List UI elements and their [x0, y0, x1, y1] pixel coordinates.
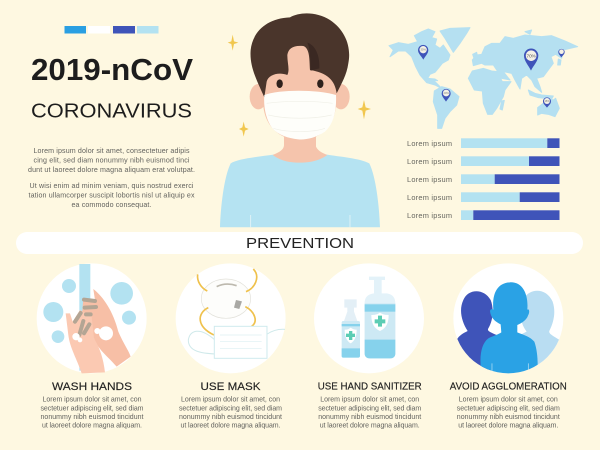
column: avoid agglomeration: ut laoreet dolore magna aliquam. — [458, 423, 558, 430]
prevention banner: PREVENTION — [246, 236, 354, 252]
map pins: 70% — [526, 53, 536, 58]
column: use hand sanitizer: Lorem ipsum dolor sit amet, con — [320, 396, 419, 404]
column: wash hands — [40, 381, 144, 430]
column: use mask — [179, 381, 282, 430]
row 2 — [407, 156, 560, 166]
column: wash hands: ut laoreet dolore magna aliquam. — [42, 423, 142, 430]
column: wash hands: sectetuer adipiscing elit, sed diam — [40, 405, 144, 412]
column: use mask: ut laoreet dolore magna aliquam. — [180, 423, 281, 430]
character wearing mask — [220, 13, 380, 227]
column: wash hands: nonummy nibh euismod tincidunt — [40, 414, 144, 421]
row 1: Lorem ipsum — [407, 139, 452, 148]
map pins: 20% — [443, 91, 449, 95]
intro text: ea commodo consequat. — [72, 201, 152, 209]
column: use hand sanitizer: ut laoreet dolore magna aliquam. — [320, 423, 420, 430]
column: use hand sanitizer — [318, 382, 422, 430]
row 5: Lorem ipsum — [407, 211, 452, 220]
row 4: Lorem ipsum — [407, 193, 452, 202]
ears — [250, 84, 350, 109]
row 1 — [407, 138, 560, 148]
row 5 — [407, 210, 560, 220]
face mask — [264, 91, 336, 139]
panel: sanitizer and agglomeration icons — [314, 263, 567, 375]
neck — [273, 133, 327, 163]
sparkles — [228, 35, 371, 137]
title: 2019-nCoV — [31, 52, 193, 87]
column: avoid agglomeration: nonummy nibh euismod tincidunt — [457, 414, 560, 421]
hair — [251, 13, 349, 97]
map pins: 15% — [544, 99, 550, 103]
column: wash hands: Lorem ipsum dolor sit amet, con — [42, 396, 142, 404]
intro text: Lorem ipsum dolor sit amet, consectetuer adipis — [34, 147, 190, 155]
column: avoid agglomeration: sectetuer adipiscing elit, sed diam — [457, 405, 560, 412]
row 4 — [407, 192, 560, 202]
row 3 — [407, 174, 560, 184]
map pins — [418, 45, 565, 108]
column: use mask: sectetuer adipiscing elit, sed diam — [179, 405, 282, 412]
column: avoid agglomeration — [450, 382, 567, 430]
icon: avoid agglomeration — [450, 263, 567, 375]
intro text: tation ullamcorper suscipit lobortis nisl ut aliquip ex — [28, 192, 195, 200]
column: use hand sanitizer: nonummy nibh euismod tincidunt — [318, 414, 421, 421]
column: use hand sanitizer: sectetuer adipiscing elit, sed diam — [318, 405, 421, 412]
column: use mask: USE MASK — [200, 381, 261, 393]
intro text — [28, 147, 195, 209]
icon: use mask — [176, 263, 286, 373]
intro text: Ut wisi enim ad minim veniam, quis nostrud exerci — [30, 182, 194, 190]
world map — [389, 28, 578, 128]
panel: wash hands and use mask icons — [37, 263, 286, 373]
column: use mask: nonummy nibh euismod tincidunt — [179, 414, 282, 421]
bar chart — [407, 138, 560, 220]
shirt — [220, 154, 380, 227]
column: wash hands: WASH HANDS — [52, 381, 132, 393]
column: avoid agglomeration: AVOID AGGLOMERATION — [450, 382, 567, 392]
eyes — [276, 79, 283, 88]
row 2: Lorem ipsum — [407, 157, 452, 166]
intro text: cing elit, sed diam nonummy nibh euismod tinci — [34, 156, 190, 164]
map pins: 35% — [420, 48, 426, 52]
face — [263, 43, 336, 140]
intro text: dunt ut laoreet dolore magna aliquam erat volutpat. — [28, 166, 195, 174]
icon: wash hands — [37, 263, 147, 373]
prevention banner — [16, 232, 583, 254]
colour swatches — [64, 26, 158, 34]
column: avoid agglomeration: Lorem ipsum dolor sit amet, con — [459, 396, 558, 404]
icon: hand sanitizer — [314, 263, 424, 373]
column: use hand sanitizer: USE HAND SANITIZER — [318, 382, 422, 392]
row 3: Lorem ipsum — [407, 175, 452, 184]
subtitle: CORONAVIRUS — [31, 100, 192, 122]
column: use mask: Lorem ipsum dolor sit amet, con — [181, 396, 280, 404]
